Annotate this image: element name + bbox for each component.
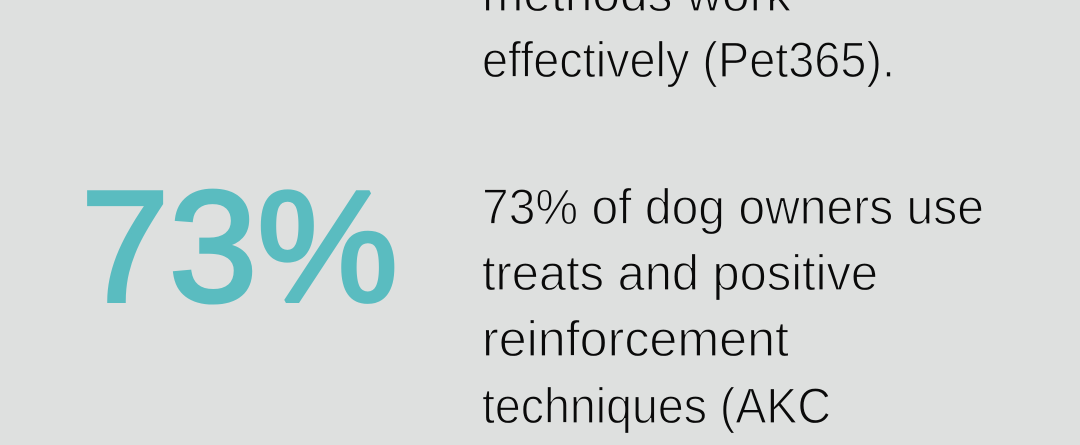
text block: previous statistic ending [482, 0, 895, 88]
text block: 73% description: techniques (AKC [482, 378, 831, 434]
big statistic: 73%: 73% [81, 159, 398, 335]
text block: 73% description: treats and positive [482, 245, 878, 301]
text block: previous statistic ending: effectively (Pet365). [482, 32, 895, 88]
text block: 73% description [482, 179, 984, 434]
text block: 73% description: reinforcement [482, 311, 789, 367]
text block: 73% description: 73% of dog owners use [482, 179, 984, 235]
